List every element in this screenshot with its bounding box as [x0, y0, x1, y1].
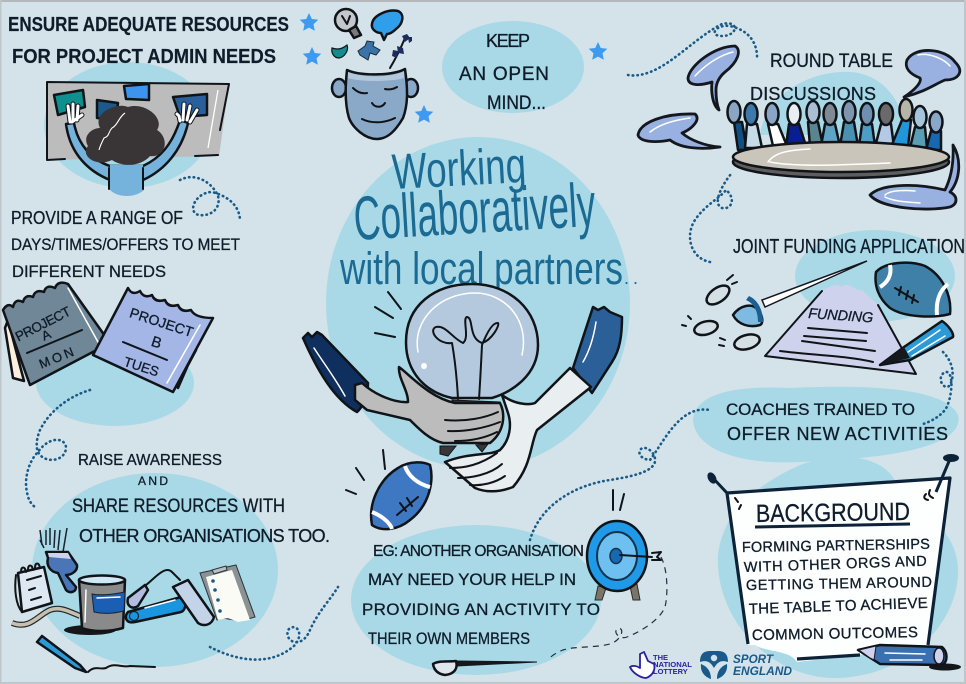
illustration: project calendars [3, 283, 213, 392]
body [110, 165, 144, 196]
face [346, 69, 407, 139]
bulb base prongs [440, 400, 500, 456]
speech bubbles [638, 46, 960, 209]
board [47, 83, 229, 160]
calendar B [93, 288, 213, 392]
paint tin [64, 576, 125, 635]
table [733, 146, 949, 178]
rolled tube [126, 597, 186, 622]
pencil with squiggle [37, 636, 155, 672]
text: keep an open mind: MIND... [487, 93, 546, 114]
text: example another organisation: MAY NEED YOUR HELP IN [368, 570, 576, 589]
icon: sword, bottom [433, 661, 537, 675]
illustration: round table discussions [638, 46, 960, 209]
text: keep an open mind [459, 31, 549, 114]
notebook [15, 564, 52, 612]
heading: ensure adequate resources: ENSURE ADEQUATE RESOURCES [8, 14, 289, 36]
text: background body: THE TABLE TO ACHIEVE [749, 595, 928, 618]
title: Working [391, 137, 527, 200]
illustration: art and craft resources [12, 528, 255, 672]
puzzle piece [358, 41, 380, 60]
heart [332, 45, 348, 58]
calendar A: MON [37, 344, 76, 372]
mini speech bubble [372, 11, 402, 40]
logo: the national lottery: LOTTERY [653, 667, 688, 676]
clipboard [200, 565, 255, 622]
text: raise awareness and share resources [72, 452, 330, 546]
logo: sport england: SPORT [733, 654, 774, 666]
text: example another organisation: PROVIDING AN ACTIVITY TO [362, 600, 600, 619]
paint brush [40, 528, 77, 592]
text: provide a range of offers: DIFFERENT NEEDS [12, 262, 166, 281]
calendar A: PROJECT [13, 304, 73, 344]
panel: background sign [706, 454, 961, 670]
text: keep an open mind: AN OPEN [459, 64, 549, 85]
people [728, 99, 942, 150]
text: provide a range of offers [11, 208, 240, 281]
calendar A [3, 283, 110, 385]
title: with local partners [339, 243, 623, 294]
fencing sword [733, 261, 867, 326]
calendar B: TUES [122, 354, 161, 379]
text: coaches trained: OFFER NEW ACTIVITIES [727, 424, 948, 444]
logo: sport england: ENGLAND [733, 666, 792, 678]
text: raise awareness and share resources: OTHER ORGANISATIONS TOO. [79, 526, 330, 546]
illustration: target and arrow [550, 490, 667, 658]
text: background body: COMMON OUTCOMES [752, 624, 918, 644]
text: background body: WITH OTHER ORGS AND [744, 554, 927, 576]
tape measure [12, 609, 80, 625]
arms [66, 120, 188, 180]
hands [68, 104, 197, 122]
title: .. [624, 268, 638, 288]
text: raise awareness and share resources: AND [138, 474, 168, 488]
logo: sport england [700, 651, 792, 679]
text: example another organisation: EG: ANOTHER ORGANISATION [373, 543, 584, 560]
logo: the national lottery [630, 652, 692, 678]
right arm sleeve [573, 307, 622, 393]
illustration: person at project board [47, 82, 229, 196]
text: coaches trained [726, 400, 948, 444]
mini bulb [335, 9, 361, 38]
plant [390, 34, 412, 68]
text: background body: GETTING THEM AROUND [746, 575, 932, 594]
sticky notes [54, 84, 207, 120]
icon: pencil [858, 645, 961, 670]
heading: background: BACKGROUND [756, 498, 910, 528]
pucks [682, 275, 761, 352]
calendar B: B [149, 333, 164, 352]
heading: ensure adequate resources [8, 14, 289, 68]
left hand [355, 367, 503, 443]
paper [765, 285, 916, 374]
spark lines [375, 292, 401, 337]
text: round table discussions: DISCUSSIONS [750, 84, 876, 104]
heading: ensure adequate resources: FOR PROJECT ADMIN NEEDS [12, 46, 276, 68]
right hand [445, 368, 591, 491]
illustration: funding application [682, 261, 953, 374]
logo: the national lottery: THE [653, 653, 668, 662]
text: example another organisation [362, 543, 600, 648]
text: example another organisation: THEIR OWN MEMBERS [368, 629, 530, 648]
left arm sleeve [303, 332, 368, 412]
sign pins [712, 459, 950, 493]
title: Collaboratively [352, 171, 597, 254]
illustration: funding application: FUNDING [808, 306, 874, 327]
text: coaches trained: COACHES TRAINED TO [726, 400, 915, 419]
paint roller [146, 570, 214, 625]
text: round table discussions [750, 51, 893, 104]
logo: the national lottery: NATIONAL [653, 660, 692, 669]
calendar B: PROJECT [128, 304, 196, 340]
text: provide a range of offers: PROVIDE A RANGE OF [11, 208, 183, 228]
text: provide a range of offers: DAYS/TIMES/OFFERS TO MEET [11, 235, 240, 254]
text: round table discussions: ROUND TABLE [770, 51, 893, 72]
text: raise awareness and share resources: SHARE RESOURCES WITH [72, 496, 285, 517]
text: keep an open mind: KEEP [486, 31, 530, 51]
text: raise awareness and share resources: RAISE AWARENESS [78, 452, 222, 469]
text: background body [742, 537, 932, 644]
rugby ball [876, 263, 950, 316]
lightbulb [406, 284, 538, 398]
illustration: rugby ball, centre [346, 450, 431, 529]
pen [880, 321, 953, 365]
sign board [727, 478, 950, 662]
title [339, 137, 638, 294]
ears [332, 79, 346, 97]
illustration: head with open mind [332, 9, 418, 139]
hair [86, 106, 165, 165]
calendar A: A [39, 326, 53, 344]
small tube [128, 585, 148, 608]
text: background body: FORMING PARTNERSHIPS [742, 537, 930, 556]
icon: stars [300, 13, 607, 123]
illustration: lightbulb and shaking hands [303, 284, 622, 491]
